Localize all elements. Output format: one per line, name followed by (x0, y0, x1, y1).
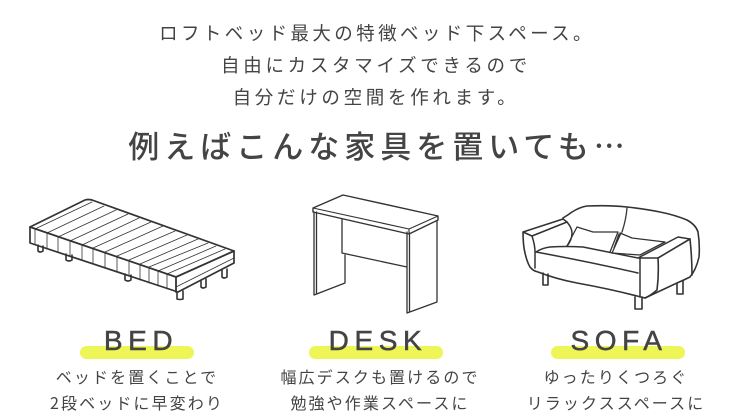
caption: desk (280, 364, 480, 414)
intro text: 自分だけの空間を作れます。 (233, 84, 519, 110)
caption: bed (50, 364, 224, 414)
intro text: 自由にカスタマイズできるので (221, 52, 531, 78)
label: DESK: DESK (329, 325, 427, 356)
caption: sofa (527, 364, 705, 414)
caption: sofa: ゆったりくつろぐ (544, 364, 688, 388)
caption: desk: 幅広デスクも置けるので (280, 364, 480, 388)
label: BED: BED (104, 325, 178, 356)
caption: bed: ベッドを置くことで (56, 364, 218, 388)
caption: desk: 勉強や作業スペースに (290, 390, 470, 414)
highlight: sofa (551, 346, 685, 359)
label: SOFA: SOFA (570, 325, 668, 356)
heading: 例えばこんな家具を置いても… (128, 122, 630, 167)
highlight: desk (309, 346, 443, 359)
intro text (159, 20, 595, 110)
highlight: bed (80, 346, 194, 359)
caption: bed: 2段ベッドに早変わり (50, 390, 224, 414)
caption: sofa: リラックススペースに (527, 390, 705, 414)
intro text: ロフトベッド最大の特徴ベッド下スペース。 (159, 20, 595, 46)
